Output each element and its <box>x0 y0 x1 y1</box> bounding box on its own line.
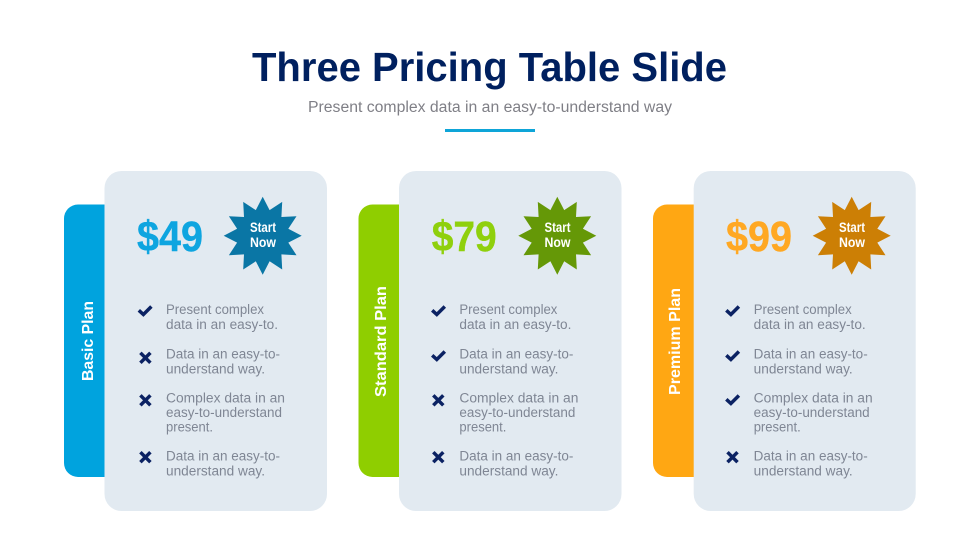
badge: start now <box>224 197 302 275</box>
feature text 3: Complex data in an <box>166 390 285 405</box>
feature text 2 <box>166 346 280 376</box>
icon: cross <box>433 452 443 462</box>
feature text 4: Data in an easy-to- <box>754 449 868 464</box>
icon: cross <box>433 395 443 405</box>
card: premium plan <box>694 171 916 511</box>
price: $49: $49 <box>137 213 203 261</box>
price: $79: $79 <box>432 213 497 261</box>
feature text 1: Present complex <box>754 302 852 317</box>
badge: start now: Start <box>839 220 865 235</box>
feature text 3 <box>166 390 285 435</box>
card: standard plan <box>399 171 622 511</box>
feature text 3: easy-to-understand <box>754 405 870 420</box>
title underline <box>445 129 535 132</box>
feature text 1: Present complex <box>459 302 558 317</box>
icon: check <box>726 396 739 404</box>
icon: check <box>432 352 445 360</box>
tab: basic plan <box>64 204 110 477</box>
feature text 4: understand way. <box>166 464 265 479</box>
icon: cross <box>140 353 150 363</box>
feature text 4 <box>459 449 573 479</box>
icon: check <box>726 352 739 360</box>
feature text 4 <box>166 449 280 479</box>
feature text 2: understand way. <box>166 361 265 376</box>
panel: standard plan <box>358 171 622 511</box>
feature text 3: Complex data in an <box>754 390 873 405</box>
feature text 4: Data in an easy-to- <box>166 449 280 464</box>
icon: cross <box>140 395 150 405</box>
badge: start now <box>518 197 596 275</box>
label: premium plan: Premium Plan <box>667 288 684 395</box>
icon: check <box>432 306 445 314</box>
tab: standard plan <box>358 204 405 477</box>
badge: start now: Now <box>250 235 277 250</box>
feature text 1: data in an easy-to. <box>754 317 866 332</box>
feature text 4 <box>754 449 868 479</box>
feature text 3: present. <box>166 420 213 435</box>
panel: premium plan <box>653 171 916 511</box>
feature text 1: data in an easy-to. <box>459 317 571 332</box>
feature text 3: easy-to-understand <box>459 405 575 420</box>
feature text 2 <box>459 346 573 376</box>
panel: basic plan <box>64 171 327 511</box>
feature text 3: Complex data in an <box>459 390 578 405</box>
feature text 2: Data in an easy-to- <box>166 346 280 361</box>
price: $99: $99 <box>726 213 792 261</box>
badge: start now: Start <box>250 220 276 235</box>
icon: cross <box>728 452 738 462</box>
badge: start now: Now <box>544 235 571 250</box>
badge: start now <box>813 197 891 275</box>
feature text 3: easy-to-understand <box>166 405 282 420</box>
subtitle: Present complex data in an easy-to-understand way <box>308 99 672 116</box>
feature text 1 <box>459 302 571 332</box>
icon: cross <box>140 452 150 462</box>
feature text 4: understand way. <box>459 464 558 479</box>
label: standard plan: Standard Plan <box>373 286 390 397</box>
feature text 3: present. <box>754 420 801 435</box>
feature text 3 <box>754 390 873 435</box>
feature text 1: Present complex <box>166 302 264 317</box>
feature text 4: understand way. <box>754 464 853 479</box>
feature text 3 <box>459 390 578 435</box>
feature text 2: understand way. <box>459 361 558 376</box>
feature text 1 <box>166 302 278 332</box>
feature text 3: present. <box>459 420 506 435</box>
badge: start now: Start <box>544 220 571 235</box>
feature text 2: Data in an easy-to- <box>459 346 573 361</box>
tab: premium plan <box>653 204 700 477</box>
feature text 2 <box>754 346 868 376</box>
icon: check <box>726 306 739 314</box>
feature text 1: data in an easy-to. <box>166 317 278 332</box>
feature text 2: understand way. <box>754 361 853 376</box>
badge: start now: Now <box>839 235 866 250</box>
feature text 1 <box>754 302 866 332</box>
title: Three Pricing Table Slide <box>252 44 727 90</box>
card: basic plan <box>104 171 327 511</box>
feature text 4: Data in an easy-to- <box>459 449 573 464</box>
label: basic plan: Basic Plan <box>80 301 97 381</box>
icon: check <box>139 306 151 314</box>
feature text 2: Data in an easy-to- <box>754 346 868 361</box>
